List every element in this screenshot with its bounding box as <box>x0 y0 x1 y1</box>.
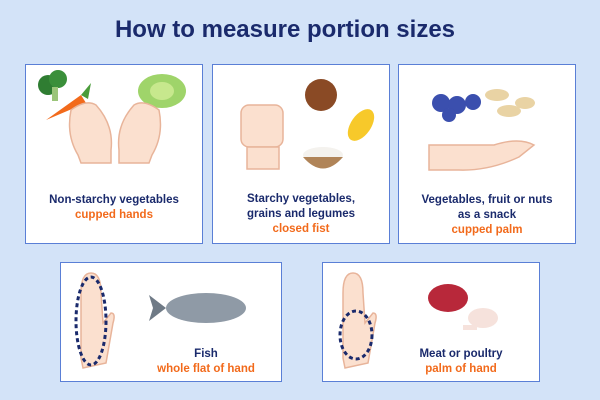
panel: fish: Fish <box>194 348 218 360</box>
icon: corn <box>342 105 380 145</box>
icon: cashews <box>485 89 535 117</box>
panel: fish: whole flat of hand <box>157 363 255 375</box>
icon: cupped palm <box>429 141 534 170</box>
icon: steak and chicken <box>428 284 498 330</box>
panel: non-starchy vegetables: Non-starchy vegetables <box>49 194 179 206</box>
panel: starchy vegetables <box>212 64 390 244</box>
icon: broccoli and carrot <box>38 70 91 120</box>
icon: bread <box>305 79 337 111</box>
panel: meat <box>322 262 540 382</box>
icon: fish <box>149 293 246 323</box>
icon: lettuce <box>138 74 186 108</box>
icon: blueberries <box>432 94 481 122</box>
panel: non-starchy vegetables <box>25 64 203 244</box>
title: How to measure portion sizes <box>115 16 455 43</box>
icon: rice bowl <box>303 147 343 168</box>
panel: snack: cupped palm <box>452 224 522 236</box>
panel: snack: as a snack <box>458 209 516 221</box>
panel: fish <box>60 262 282 382</box>
panel: non-starchy vegetables: cupped hands <box>75 209 153 221</box>
icon: closed fist <box>241 105 283 169</box>
panel: snack <box>398 64 576 244</box>
icon: cupped hands <box>70 103 160 163</box>
panel: snack: Vegetables, fruit or nuts <box>422 194 552 206</box>
icon: flat hand <box>76 273 114 368</box>
panel: starchy vegetables: Starchy vegetables, <box>247 193 355 205</box>
panel: meat: Meat or poultry <box>419 348 503 360</box>
icon: palm of hand <box>340 273 376 368</box>
panel: starchy vegetables: grains and legumes <box>247 208 355 220</box>
panel: starchy vegetables: closed fist <box>273 223 329 235</box>
panel: meat: palm of hand <box>425 363 497 375</box>
